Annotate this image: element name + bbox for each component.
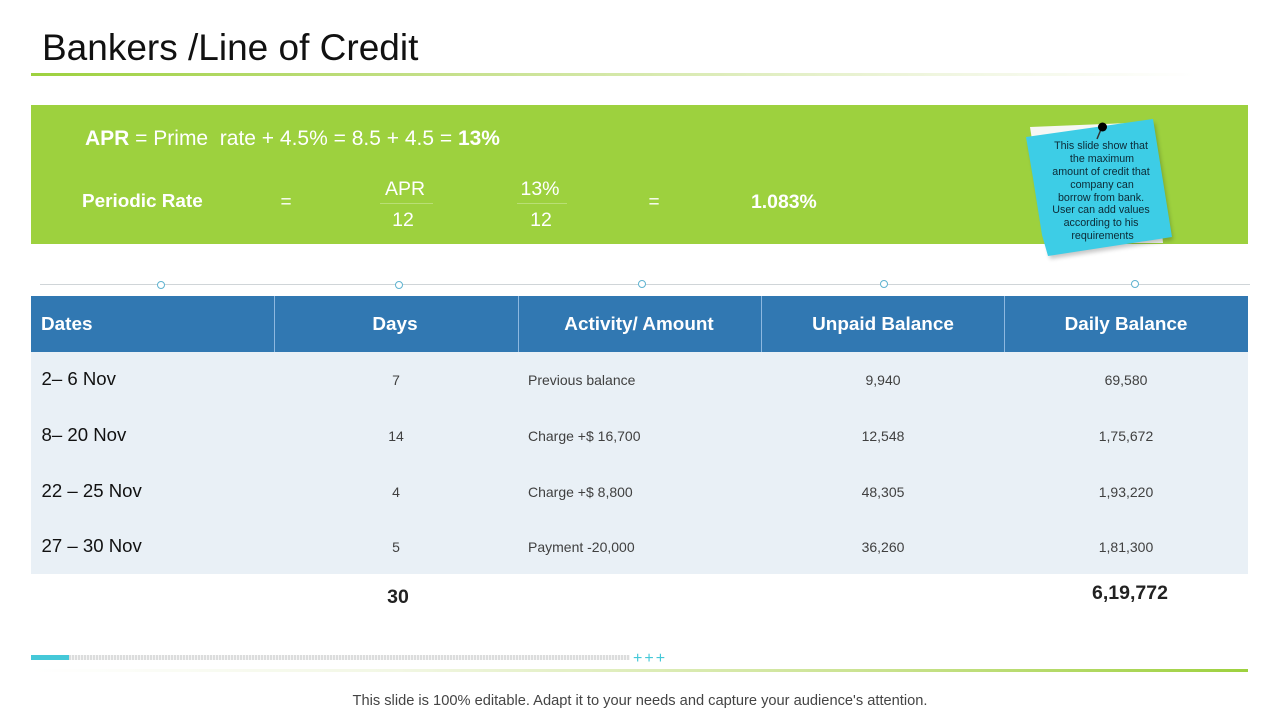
marker xyxy=(1131,280,1139,288)
marker xyxy=(638,280,646,288)
panel: rate formula xyxy=(31,105,1248,244)
progress accent xyxy=(31,655,69,660)
header: dates: Dates xyxy=(41,314,92,335)
total daily balance: 6,19,772 xyxy=(1092,582,1168,604)
row 1: Previous balance xyxy=(528,372,635,388)
footer text: This slide is 100% editable. Adapt it to your needs and capture your audience's attention. xyxy=(353,693,927,709)
marker xyxy=(880,280,888,288)
timeline with markers xyxy=(40,284,1250,285)
equals sign: = xyxy=(280,192,292,213)
icon: sticky note: according to his xyxy=(1064,217,1138,229)
icon: sticky note: borrow from bank. xyxy=(1058,192,1144,204)
equals sign: = xyxy=(648,192,660,213)
header: activity: Activity/ Amount xyxy=(564,314,714,335)
row 1: 9,940 xyxy=(865,372,901,388)
row 1 xyxy=(42,368,1147,389)
row 4: 27 – 30 Nov xyxy=(42,535,142,556)
periodic rate label: Periodic Rate xyxy=(82,191,203,212)
periodic rate result: 1.083% xyxy=(751,191,817,213)
row 2 xyxy=(42,424,1153,445)
row 4: 36,260 xyxy=(862,539,904,555)
icon: sticky note: requirements xyxy=(1071,230,1134,242)
row 4: 1,81,300 xyxy=(1099,539,1153,555)
icon: sticky note: company can xyxy=(1070,179,1134,191)
row 3 xyxy=(42,480,1153,501)
row 3: 1,93,220 xyxy=(1099,484,1153,500)
icon: sticky note: User can add values xyxy=(1052,204,1150,216)
marker xyxy=(157,281,165,289)
progress dotted bar xyxy=(69,655,630,660)
row 3: 48,305 xyxy=(862,484,904,500)
row 3: 4 xyxy=(392,484,400,500)
fraction: 13% over 12 xyxy=(517,178,567,231)
row 2: 1,75,672 xyxy=(1099,428,1153,444)
row 1: 7 xyxy=(392,372,400,388)
row 3: 22 – 25 Nov xyxy=(42,480,142,501)
table body xyxy=(31,352,1248,574)
row 3: Charge +$ 8,800 xyxy=(528,484,633,500)
footer line xyxy=(31,669,1248,672)
row 1: 2– 6 Nov xyxy=(42,368,116,389)
fraction: APR over 12: 12 xyxy=(392,209,414,231)
icon: sticky note xyxy=(1026,119,1174,260)
icon: sticky note: amount of credit that xyxy=(1052,166,1150,178)
row 4 xyxy=(42,535,1153,556)
total days: 30 xyxy=(387,586,409,608)
title underline xyxy=(31,73,1196,76)
fraction: APR over 12: APR xyxy=(385,178,425,200)
fraction: 13% over 12: 12 xyxy=(530,209,552,231)
row 2: Charge +$ 16,700 xyxy=(528,428,640,444)
icon: sticky note: This slide show that xyxy=(1054,140,1148,152)
header: unpaid balance: Unpaid Balance xyxy=(812,314,954,335)
table header xyxy=(31,296,1248,352)
icon: sticky note: the maximum xyxy=(1070,153,1134,165)
fraction: 13% over 12: 13% xyxy=(520,178,560,200)
fraction: APR over 12 xyxy=(380,178,433,231)
row 2: 12,548 xyxy=(862,428,904,444)
row 4: Payment -20,000 xyxy=(528,539,635,555)
row 2: 14 xyxy=(388,428,404,444)
row 2: 8– 20 Nov xyxy=(42,424,126,445)
header: daily balance: Daily Balance xyxy=(1065,314,1187,335)
APR formula: APR = Prime rate + 4.5% = 8.5 + 4.5 = 13% xyxy=(85,127,500,150)
row 1: 69,580 xyxy=(1105,372,1147,388)
header: days: Days xyxy=(372,314,418,335)
plus marks: +++ xyxy=(633,650,667,667)
row 4: 5 xyxy=(392,539,400,555)
marker xyxy=(395,281,403,289)
title: Bankers /Line of Credit xyxy=(42,27,418,68)
